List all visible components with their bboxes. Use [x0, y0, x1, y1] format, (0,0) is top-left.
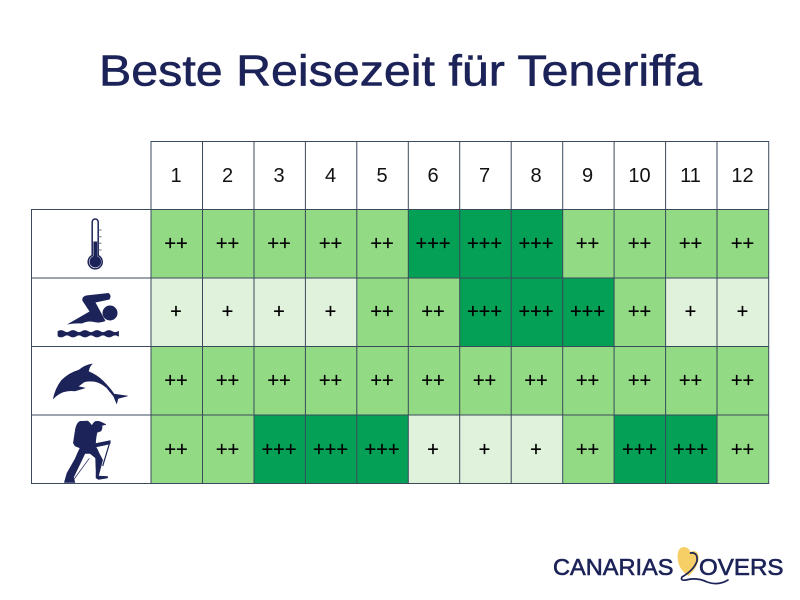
ratings: dolphin watching: ++ [628, 370, 651, 392]
ratings: swimming: + [222, 301, 233, 323]
ratings: dolphin watching: ++ [576, 370, 599, 392]
ratings: swimming: + [325, 301, 336, 323]
ratings: temperature [164, 233, 754, 255]
row: dolphin watching cells [151, 346, 769, 415]
ratings: temperature: +++ [415, 233, 451, 255]
logo text right: OVERS [699, 554, 784, 580]
ratings: temperature: ++ [628, 233, 651, 255]
ratings: swimming: + [737, 301, 748, 323]
ratings: temperature: +++ [518, 233, 554, 255]
ratings: temperature: ++ [576, 233, 599, 255]
month headers: 2 [222, 165, 233, 187]
ratings: swimming [170, 301, 748, 323]
ratings: temperature: ++ [267, 233, 291, 255]
ratings: dolphin watching [164, 370, 754, 392]
month headers: 12 [731, 165, 754, 187]
ratings: temperature: +++ [467, 233, 502, 255]
ratings: hiking: +++ [313, 439, 348, 461]
ratings: swimming: + [170, 301, 182, 323]
ratings: temperature: ++ [164, 233, 188, 255]
ratings: hiking: + [479, 439, 490, 461]
ratings: hiking: + [427, 439, 439, 461]
ratings: dolphin watching: ++ [524, 370, 548, 392]
ratings: temperature: ++ [731, 233, 754, 255]
ratings: hiking: ++ [731, 439, 754, 461]
table: best travel time by month [31, 141, 769, 484]
icon: dolphin [53, 364, 128, 404]
ratings: dolphin watching: ++ [679, 370, 702, 392]
month headers: 3 [273, 165, 285, 187]
ratings: hiking [164, 439, 754, 461]
ratings: swimming: +++ [518, 301, 554, 323]
ratings: temperature: ++ [216, 233, 239, 255]
ratings: hiking: ++ [576, 439, 599, 461]
ratings: swimming: ++ [370, 301, 394, 323]
ratings: swimming: ++ [421, 301, 445, 323]
title: Beste Reisezeit für Teneriffa [99, 48, 703, 96]
month headers: 5 [376, 165, 388, 187]
ratings: dolphin watching: ++ [473, 370, 496, 392]
ratings: hiking: +++ [364, 439, 400, 461]
ratings: temperature: ++ [319, 233, 342, 255]
ratings: temperature: ++ [679, 233, 702, 255]
ratings: hiking: +++ [673, 439, 708, 461]
ratings: dolphin watching: ++ [421, 370, 445, 392]
icon: hiker [64, 421, 110, 482]
ratings: dolphin watching: ++ [370, 370, 394, 392]
row: hiking cells [151, 415, 769, 484]
month headers: 1 [170, 165, 182, 187]
ratings: dolphin watching: ++ [164, 370, 188, 392]
ratings: swimming: +++ [570, 301, 605, 323]
ratings: dolphin watching: ++ [319, 370, 342, 392]
ratings: swimming: +++ [467, 301, 502, 323]
month headers: 9 [582, 165, 593, 187]
ratings: hiking: ++ [216, 439, 239, 461]
ratings: hiking: +++ [261, 439, 297, 461]
ratings: dolphin watching: ++ [267, 370, 291, 392]
month headers [170, 165, 754, 187]
month headers: 11 [680, 165, 701, 187]
ratings: temperature: ++ [370, 233, 394, 255]
ratings: dolphin watching: ++ [216, 370, 239, 392]
ratings: hiking: ++ [164, 439, 188, 461]
ratings: hiking: +++ [622, 439, 657, 461]
ratings: swimming: + [273, 301, 285, 323]
month headers: 7 [479, 165, 490, 187]
month headers: 10 [628, 165, 651, 187]
ratings: swimming: ++ [628, 301, 651, 323]
logo text left: CANARIAS [553, 554, 674, 580]
logo heart [678, 547, 699, 576]
ratings: dolphin watching: ++ [731, 370, 754, 392]
logo: Canarias Lovers [553, 547, 784, 584]
icon: swimmer [58, 293, 118, 337]
row: temperature cells [151, 210, 769, 278]
month headers: 6 [427, 165, 439, 187]
logo loop L [682, 553, 728, 584]
ratings: swimming: + [685, 301, 696, 323]
ratings: hiking: + [530, 439, 542, 461]
icon: thermometer [88, 219, 102, 269]
month headers: 8 [530, 165, 542, 187]
month headers: 4 [325, 165, 336, 187]
row: swimming cells [151, 278, 769, 346]
